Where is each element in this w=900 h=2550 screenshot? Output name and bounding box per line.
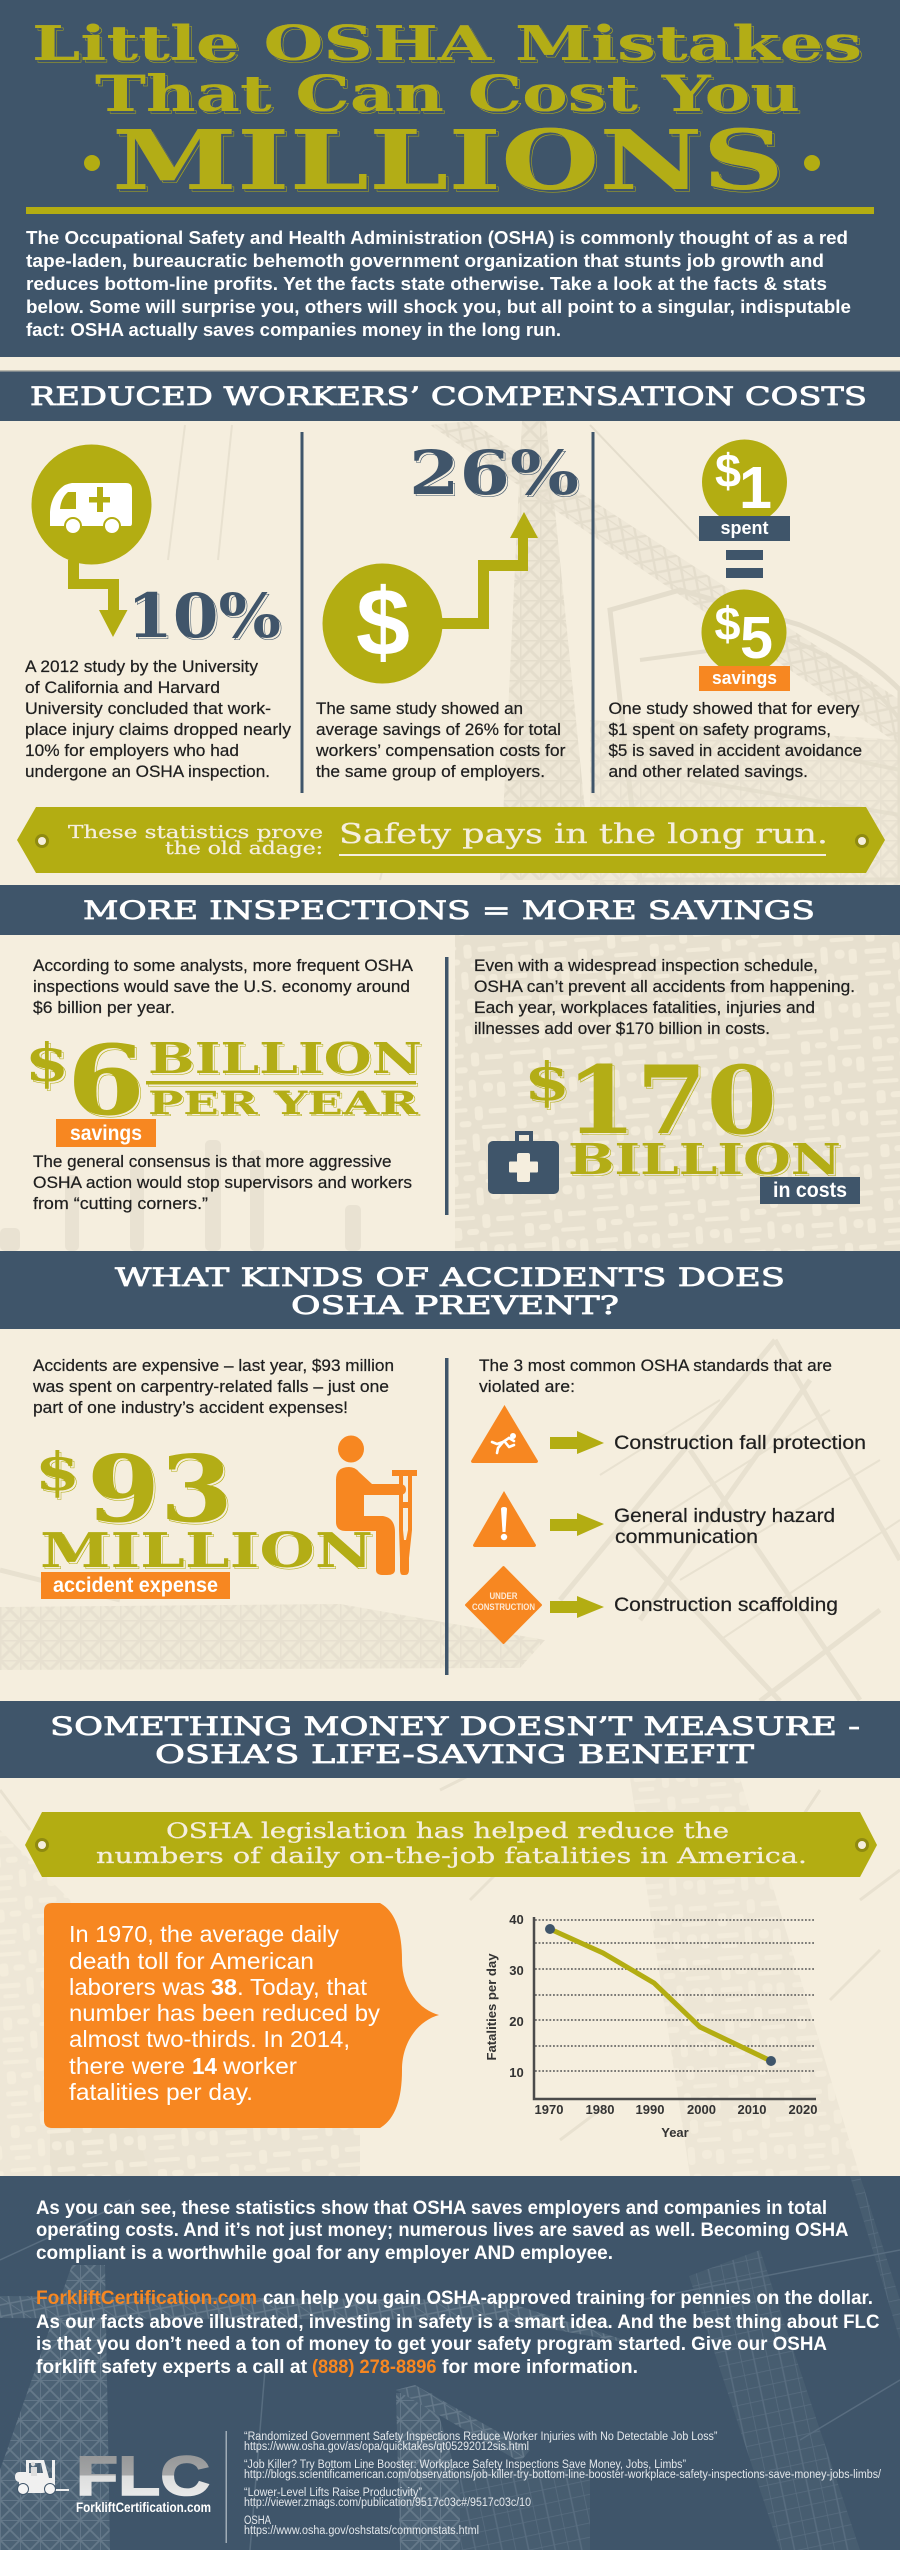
text: inspection schedule: illnesses add over $170 billion in costs. (474, 1020, 770, 1038)
icon: $1 circle: $ (715, 444, 741, 497)
label: savings: savings (70, 1122, 142, 1145)
stat: $93 million (35, 1435, 373, 1579)
logo url: ForkliftCertification.com (76, 2499, 211, 2515)
label: savings: savings (712, 668, 777, 688)
icon: dollar circle: $ (356, 569, 410, 676)
closing paragraph (36, 2198, 849, 2264)
icon: falling worker sign (471, 1405, 538, 1463)
text: one study: $1 spent on safety programs, (608, 721, 831, 739)
item label: communication (615, 1527, 758, 1548)
icon: warning sign (473, 1491, 536, 1547)
logo: FLC forklift certification (15, 2444, 211, 2515)
banner: OSHA legislation (25, 1812, 877, 1877)
text: accidents are expensive (32, 1357, 394, 1417)
section heading: SOMETHING MONEY DOESN’T MEASURE - (50, 1712, 860, 1741)
x axis labels: 1980 (586, 2102, 614, 2117)
text: consensus: OSHA action would stop supervisors and workers (33, 1174, 412, 1192)
call to action paragraph: ForkliftCertification.com (36, 2288, 257, 2309)
text: same study: average savings of 26% for total (316, 721, 561, 739)
x axis labels (535, 2102, 817, 2117)
callout text: 38 (211, 1974, 237, 2000)
arrow (550, 1513, 604, 1536)
call to action paragraph (36, 2288, 880, 2378)
section heading (50, 1712, 860, 1769)
stat: $170 billion: 170 (566, 1046, 777, 1156)
closing paragraph: operating costs. And it’s not just money; numerous lives are saved as well. Becoming OSHA (36, 2220, 849, 2241)
x axis labels: 2010 (738, 2102, 766, 2117)
stat: $170 billion (524, 1046, 841, 1184)
section heading (115, 1263, 785, 1320)
item label: Construction fall protection (614, 1433, 866, 1454)
text: 3 most common (479, 1357, 832, 1396)
text: consensus: The general consensus is that more aggressive (33, 1153, 392, 1171)
intro paragraph: tape-laden, bureaucratic behemoth government organization that stunts job growth and (26, 250, 824, 271)
callout text (69, 1921, 381, 2105)
panel: $93 million (32, 1357, 417, 1599)
banner message: Safety pays in the long run. (339, 819, 828, 850)
call to action paragraph: forklift safety experts a call at (36, 2357, 308, 2378)
intro paragraph: fact: OSHA actually saves companies money in the long run. (26, 319, 561, 340)
item label (614, 1506, 835, 1548)
text: 2012 study: place injury claims dropped nearly (25, 721, 292, 739)
x axis labels: 2020 (789, 2102, 817, 2117)
stat: $93 million: MILLION (40, 1523, 373, 1579)
icon: $5 circle (702, 590, 786, 674)
text: one study (608, 700, 862, 781)
text: 2012 study: undergone an OSHA inspection. (25, 763, 270, 781)
intro paragraph: The Occupational Safety and Health Administration (OSHA) is commonly thought of as a red (26, 227, 848, 248)
callout text: death toll for American (69, 1948, 314, 1974)
arrow (550, 1596, 604, 1618)
text: accidents are expensive: was spent on carpentry-related falls – just one (32, 1378, 389, 1396)
label: savings (56, 1119, 156, 1147)
y axis labels (509, 1912, 524, 2080)
text: same study: The same study showed an (316, 700, 523, 718)
section bar: more inspections (0, 885, 900, 935)
text: analysts (33, 957, 413, 1017)
references: https://www.osha.gov/as/opa/quicktakes/qt05292012sis.html (244, 2441, 529, 2453)
stat: $170 billion: $ (524, 1052, 570, 1113)
callout text: laborers was (69, 1974, 205, 2000)
title rule (26, 207, 874, 214)
x axis title: Year (661, 2125, 689, 2140)
callout text: there were (69, 2053, 185, 2079)
text: consensus (33, 1153, 412, 1213)
text: inspection schedule (474, 957, 855, 1038)
panel: 26% savings stat (315, 438, 579, 781)
logo wordmark: FLC (76, 2444, 210, 2507)
text: 2012 study: 10% for employers who had (25, 742, 239, 760)
text: same study: workers’ compensation costs for (315, 742, 566, 760)
y axis labels: 40 (509, 1912, 524, 1927)
item: hazard communication (473, 1491, 835, 1548)
item label: Construction scaffolding (614, 1595, 838, 1616)
section heading: OSHA’S LIFE-SAVING BENEFIT (155, 1740, 754, 1769)
call to action paragraph: As our facts above illustrated, investing in safety is a smart idea. And the best thing about FLC (36, 2312, 880, 2333)
closing paragraph: compliant is a worthwhile goal for any employer AND employee. (36, 2243, 613, 2264)
text: 3 most common: The 3 most common OSHA standards that are (479, 1357, 832, 1375)
text: inspection schedule: Even with a widespread inspection schedule, (474, 957, 818, 975)
icon: $1 circle: 1 (739, 455, 772, 521)
call to action paragraph: for more information. (442, 2357, 638, 2378)
closing paragraph: As you can see, these statistics show that OSHA saves employers and companies in total (36, 2198, 827, 2219)
text: analysts: According to some analysts, more frequent OSHA (33, 957, 413, 975)
panel: $6 billion savings (25, 957, 422, 1213)
stat: $93 million: 93 (87, 1435, 233, 1543)
section heading: REDUCED WORKERS’ COMPENSATION COSTS (30, 382, 867, 411)
background texture: building in inspections section (0, 935, 900, 1251)
text: 2012 study (25, 658, 292, 781)
text: one study: $5 is saved in accident avoidance (608, 742, 862, 760)
text: analysts: inspections would save the U.S. economy around (33, 978, 410, 996)
section heading: OSHA PREVENT? (291, 1291, 619, 1320)
banner: safety pays (17, 807, 885, 873)
icon: under construction sign: UNDER (490, 1591, 518, 1601)
y axis labels: 10 (509, 2065, 524, 2080)
callout: death toll (44, 1903, 439, 2128)
title: MILLIONS (112, 113, 784, 209)
item: scaffolding (466, 1567, 838, 1643)
banner lead-in: the old adage: (165, 838, 323, 859)
icon: ambulance in circle (32, 444, 152, 564)
text: same study (315, 700, 566, 781)
label: spent: spent (720, 518, 768, 538)
stat: $6 billion per year: 6 (67, 1024, 145, 1137)
references: OSHA (244, 2515, 271, 2527)
text: analysts: $6 billion per year. (33, 999, 175, 1017)
icon: $1 circle (702, 440, 787, 524)
label: accident expense: accident expense (53, 1574, 218, 1597)
icon: under construction sign: CONSTRUCTION (472, 1602, 535, 1612)
y axis title: Fatalities per day (484, 1953, 499, 2060)
panel: $1 spent = $5 savings (608, 440, 862, 781)
callout text: 14 (192, 2053, 217, 2079)
item: fall protection (471, 1405, 866, 1463)
stat: 10%: 10% (127, 581, 281, 652)
y axis labels: 30 (509, 1963, 524, 1978)
callout text: In 1970, the average daily (69, 1921, 339, 1947)
x axis labels: 2000 (687, 2102, 716, 2117)
text: inspection schedule: OSHA can’t prevent all accidents from happening. (474, 978, 855, 996)
label: spent (699, 516, 790, 541)
stat: $6 billion per year: PER YEAR (148, 1084, 419, 1122)
callout text: fatalities per day. (69, 2079, 253, 2105)
callout text: almost two-thirds. In 2014, (69, 2026, 350, 2052)
line chart: fatalities per day (484, 1912, 817, 2140)
references: “Randomized Government Safety Inspections Reduce Worker Injuries with No Detectable Job Loss” (244, 2431, 718, 2443)
stat: $6 billion per year (25, 1024, 422, 1137)
text: same study: the same group of employers. (316, 763, 545, 781)
arrow (550, 1431, 604, 1454)
banner text (96, 1819, 807, 1868)
call to action paragraph: (888) 278-8896 (312, 2357, 436, 2378)
icon: dollar circle (322, 564, 442, 684)
arrow: up from dollar (438, 512, 538, 629)
item label: General industry hazard (614, 1506, 835, 1527)
stat: $6 billion per year: $ (25, 1033, 69, 1094)
icon: $5 circle: 5 (740, 605, 773, 671)
header panel (0, 0, 900, 357)
title dots (84, 155, 820, 171)
stat: $93 million: $ (35, 1442, 80, 1503)
text: consensus: from “cutting corners.” (33, 1195, 208, 1213)
title (32, 16, 862, 209)
stat: $170 billion: BILLION (568, 1135, 841, 1184)
icon: under construction sign (466, 1567, 541, 1643)
call to action paragraph: can help you gain OSHA-approved training for pennies on the dollar. (263, 2288, 873, 2309)
footer panel (0, 2176, 900, 2550)
references (244, 2431, 882, 2537)
data line (545, 1924, 776, 2066)
icon: person on crutch (336, 1436, 417, 1575)
text: one study: and other related savings. (608, 763, 808, 781)
icon: first aid kit (488, 1131, 559, 1194)
callout text: . Today, that (237, 1974, 368, 2000)
banner lead-in: These statistics prove (68, 822, 323, 843)
text: accidents are expensive: part of one industry’s accident expenses! (33, 1399, 348, 1417)
stat: $6 billion per year: BILLION (148, 1034, 422, 1083)
intro paragraph (26, 227, 851, 340)
references: “Lower-Level Lifts Raise Productivity” (244, 2487, 422, 2499)
label: in costs (760, 1177, 860, 1204)
label: in costs: in costs (773, 1179, 847, 1202)
references: https://www.osha.gov/oshstats/commonstats.html (244, 2525, 479, 2537)
background texture: crane in compensation section (168, 421, 900, 885)
panel: $170 billion costs (474, 957, 860, 1204)
section heading: MORE INSPECTIONS = MORE SAVINGS (83, 896, 815, 925)
arrow: down to 10% (68, 560, 128, 637)
banner text: OSHA legislation has helped reduce the (166, 1819, 729, 1843)
text: accidents are expensive: Accidents are expensive – last year, $93 million (33, 1357, 394, 1375)
background texture: towers in fatalities section (0, 1760, 900, 2176)
title: That Can Cost You (95, 64, 800, 123)
section bar: what kinds of accidents (0, 1251, 900, 1329)
background texture: jib in accidents section (0, 1340, 900, 1701)
banner text: numbers of daily on-the-job fatalities in America. (96, 1844, 807, 1868)
background texture: footer cranes (0, 2176, 900, 2550)
references: http://viewer.zmags.com/publication/9517c03c#/9517c03c/10 (244, 2497, 531, 2509)
panel: most common violations (466, 1357, 866, 1643)
x axis labels: 1990 (636, 2102, 664, 2117)
stat: 26%: 26% (409, 438, 579, 509)
intro paragraph: reduces bottom-line profits. Yet the facts state otherwise. Take a look at the facts & stats (26, 273, 827, 294)
equals sign (726, 550, 763, 578)
text: 3 most common: violated are: (479, 1378, 575, 1396)
callout text: number has been reduced by (69, 2000, 381, 2026)
text: 2012 study: A 2012 study by the University (25, 658, 259, 676)
icon: forklift (15, 2460, 69, 2494)
text: 2012 study: University concluded that work- (25, 700, 271, 718)
banner lead-in (68, 822, 323, 859)
intro paragraph: below. Some will surprise you, others will shock you, but all point to a singular, indisputable (26, 296, 851, 317)
y axis labels: 20 (509, 2014, 524, 2029)
text: inspection schedule: Each year, workplaces fatalities, injuries and (474, 999, 815, 1017)
panel: 10% claims stat (25, 444, 292, 781)
section heading: WHAT KINDS OF ACCIDENTS DOES (115, 1263, 785, 1292)
references: “Job Killer? Try Bottom Line Booster: Workplace Safety Inspections Save Money, Jobs, Limbs” (244, 2459, 686, 2471)
title: Little OSHA Mistakes (32, 16, 862, 72)
section bar: something money doesn't measure (0, 1701, 900, 1778)
icon: $5 circle: $ (714, 597, 740, 650)
text: 2012 study: of California and Harvard (25, 679, 220, 697)
callout text: worker (222, 2053, 297, 2079)
section bar: reduced workers' compensation costs (0, 370, 900, 421)
call to action paragraph: is that you don’t need a ton of money to get your safety program started. Give our OSHA (36, 2334, 827, 2355)
x axis labels: 1970 (535, 2102, 563, 2117)
text: one study: One study showed that for every (608, 700, 860, 718)
label: savings (699, 666, 790, 691)
